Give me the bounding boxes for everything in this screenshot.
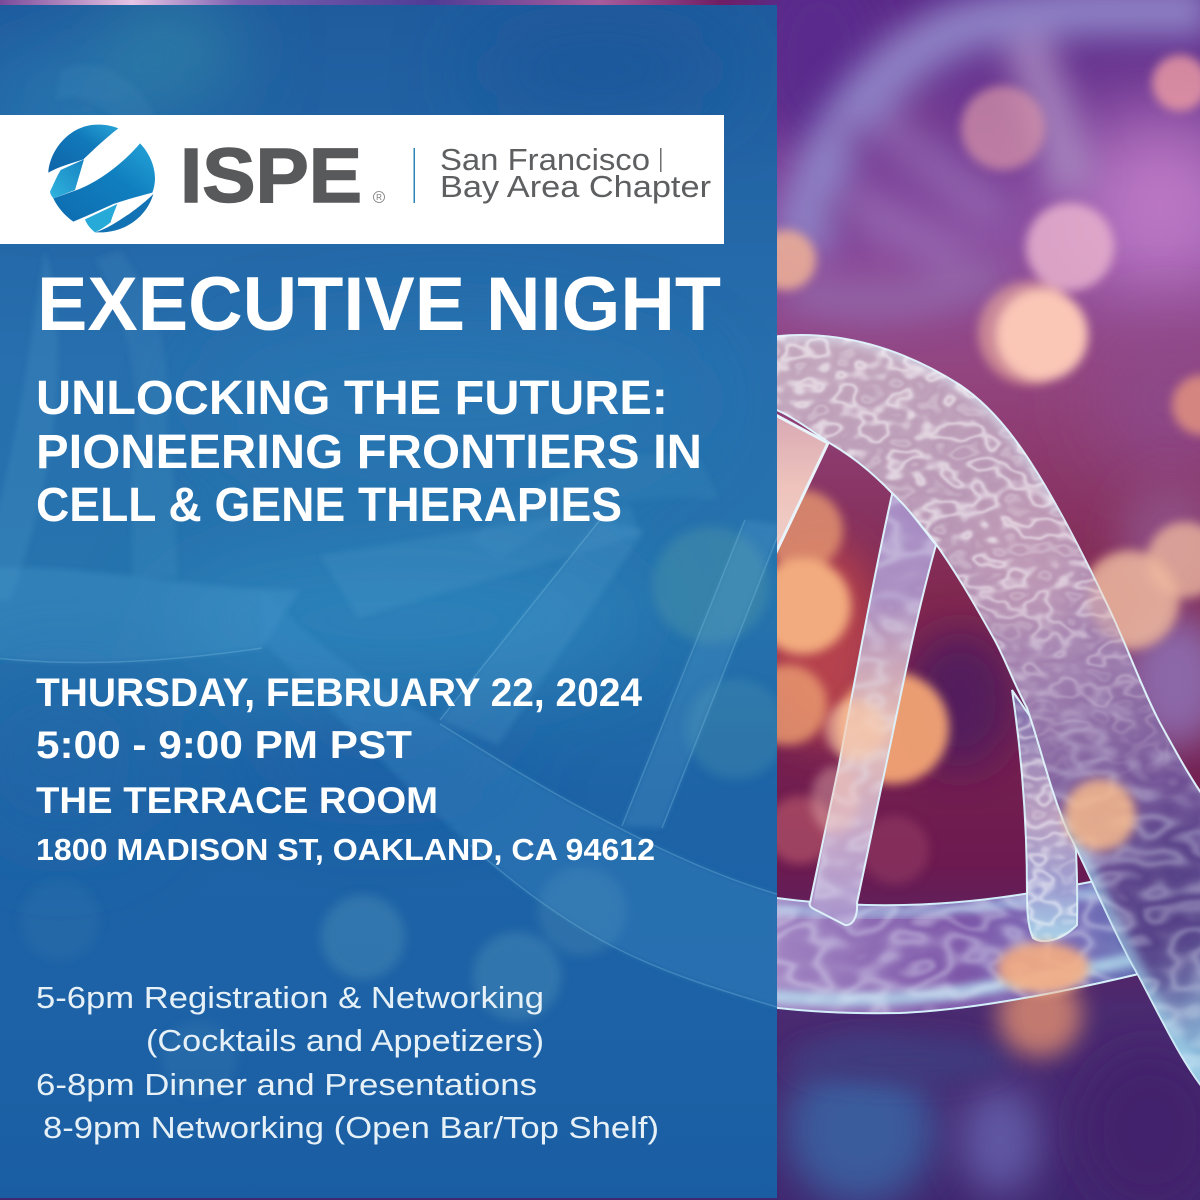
schedule: 6-8pm Dinner and Presentations [36, 1067, 537, 1102]
glow under helix [998, 973, 1082, 1057]
registered mark: R [376, 193, 382, 202]
white band [0, 115, 724, 244]
watermark strand highlights [0, 520, 782, 1008]
foreground bokeh on helix [811, 558, 1172, 994]
event details [36, 671, 655, 867]
watermark DNA strands [0, 266, 777, 1006]
bokeh lights [747, 55, 1200, 884]
helix main strand [770, 325, 1200, 1100]
panel fill [0, 5, 777, 1200]
chapter name line 1: San Francisco [440, 142, 650, 177]
schedule: 5-6pm Registration & Networking [36, 980, 544, 1015]
strand colour patches and texture [770, 325, 1200, 1100]
title: EXECUTIVE NIGHT [37, 262, 721, 347]
icon: ISPE globe [48, 125, 155, 232]
address: 1800 MADISON ST, OAKLAND, CA 94612 [36, 832, 655, 867]
panel light wash [0, 5, 600, 690]
subtitle: UNLOCKING THE FUTURE: [36, 372, 668, 425]
DNA helix [770, 325, 1200, 1100]
subtitle: CELL & GENE THERAPIES [36, 479, 622, 532]
time: 5:00 - 9:00 PM PST [36, 724, 412, 767]
helix rung left [777, 414, 830, 554]
blurred background helix, top right [790, 10, 1200, 302]
date: THURSDAY, FEBRUARY 22, 2024 [36, 671, 643, 715]
schedule: 8-9pm Networking (Open Bar/Top Shelf) [43, 1110, 659, 1145]
subtitle: PIONEERING FRONTIERS IN [36, 426, 702, 479]
top image strip [0, 0, 1200, 5]
photo color washes [760, 0, 1200, 1200]
chapter name line 2: Bay Area Chapter [440, 169, 711, 204]
ISPE wordmark: ISPE [180, 133, 362, 219]
schedule: (Cocktails and Appetizers) [146, 1023, 544, 1058]
schedule [36, 980, 659, 1145]
helix rung centre [810, 490, 936, 925]
registered mark [374, 192, 384, 202]
blue text panel [0, 0, 786, 1200]
helix rung right [1012, 690, 1077, 941]
subtitle [36, 372, 702, 532]
panel bokeh [168, 528, 777, 1090]
venue: THE TERRACE ROOM [36, 780, 438, 821]
logo divider [414, 148, 415, 203]
logo band [0, 115, 724, 244]
small bar after chapter name [660, 148, 662, 172]
helix horizontal strand [770, 880, 1150, 1015]
